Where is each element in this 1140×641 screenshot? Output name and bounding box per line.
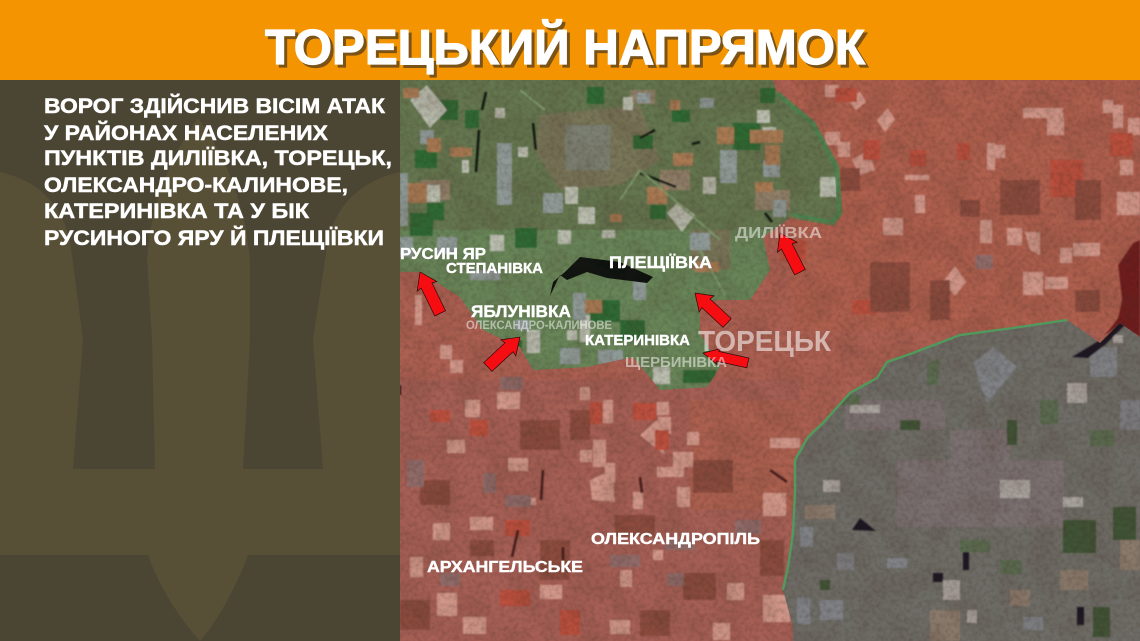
title: ТОРЕЦЬКИЙ НАПРЯМОК bbox=[268, 23, 868, 78]
map labels bbox=[400, 224, 831, 576]
map bbox=[400, 80, 1140, 641]
label: Олександро-Калинове: ОЛЕКСАНДРО-КАЛИНОВЕ bbox=[466, 320, 612, 332]
label: Степанівка: СТЕПАНІВКА bbox=[446, 260, 543, 277]
label: Плещіївка: ПЛЕЩІЇВКА bbox=[609, 254, 712, 272]
label: Торецьк: ТОРЕЦЬК bbox=[698, 326, 831, 358]
text block: attack summary: КАТЕРИНІВКА ТА У БІК bbox=[44, 200, 309, 223]
map: green liberated territory bbox=[400, 80, 850, 400]
map: green border band bbox=[777, 93, 840, 223]
arrow: Торецьк bbox=[701, 345, 750, 371]
left text panel bbox=[0, 80, 400, 641]
map: occupied red territory bbox=[400, 80, 1140, 641]
text block: attack summary: ОЛЕКСАНДРО-КАЛИНОВЕ, bbox=[44, 174, 348, 197]
title: ТОРЕЦЬКИЙ НАПРЯМОК bbox=[265, 20, 865, 75]
arrows: attack directions bbox=[410, 228, 810, 375]
text block: attack summary: ПУНКТІВ ДИЛІЇВКА, ТОРЕЦЬК, bbox=[44, 147, 392, 170]
map: grey urban territory bbox=[780, 320, 1140, 641]
arrow: Русин Яр bbox=[410, 267, 450, 318]
text block: attack summary bbox=[44, 94, 392, 250]
arrow: Катеринівка bbox=[687, 285, 735, 331]
label: Щербинівка: ЩЕРБИНІВКА bbox=[625, 354, 727, 371]
label: Олександропіль: ОЛЕКСАНДРОПІЛЬ bbox=[591, 531, 760, 548]
map: green front line bbox=[783, 320, 1067, 590]
text block: attack summary: У РАЙОНАХ НАСЕЛЕНИХ bbox=[44, 121, 328, 145]
label: Архангельське: АРХАНГЕЛЬСЬКЕ bbox=[427, 559, 583, 576]
arrow: Олександро-Калинове bbox=[480, 329, 528, 375]
text block: attack summary: ВОРОГ ЗДІЙСНИВ ВІСІМ АТАК bbox=[44, 94, 385, 118]
arrow: Диліївка bbox=[770, 228, 810, 277]
label: Яблунівка: ЯБЛУНІВКА bbox=[471, 303, 571, 321]
label: Катеринівка: КАТЕРИНІВКА bbox=[585, 332, 690, 349]
label: Русин Яр: РУСИН ЯР bbox=[400, 246, 486, 263]
icon: trident watermark bbox=[0, 118, 400, 641]
map: lake bbox=[550, 257, 653, 296]
header bar bbox=[0, 0, 1140, 80]
label: Диліївка: ДИЛІЇВКА bbox=[735, 224, 823, 242]
map: broad tonal patches bbox=[400, 80, 1140, 641]
map: satellite grain bbox=[400, 80, 1140, 641]
text block: attack summary: РУСИНОГО ЯРУ Й ПЛЕЩІЇВКИ bbox=[44, 226, 384, 250]
